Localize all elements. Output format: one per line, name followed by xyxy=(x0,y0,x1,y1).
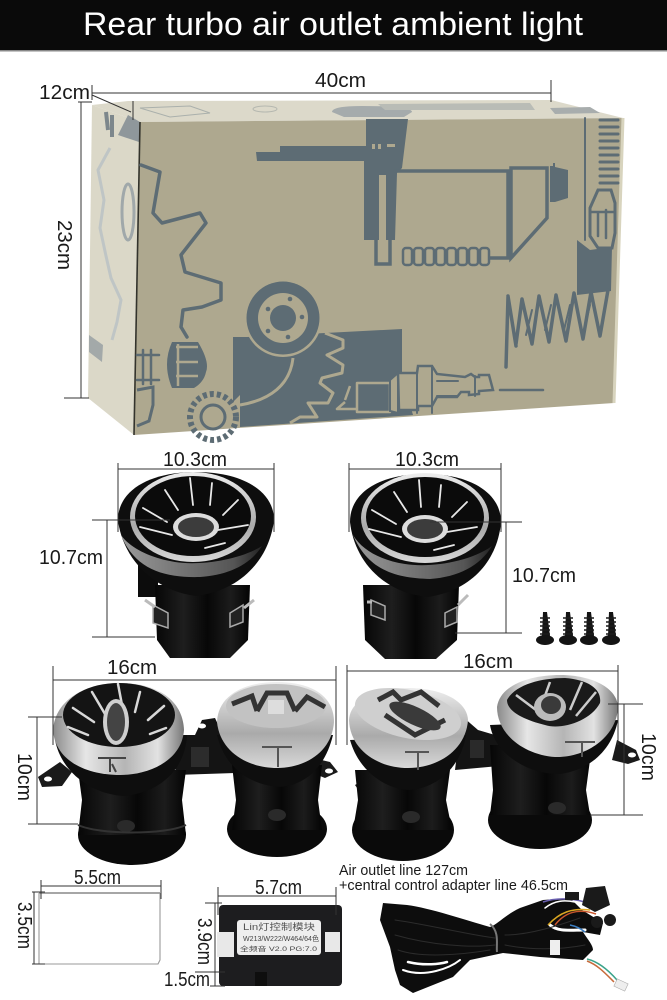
adhesive pad xyxy=(39,893,160,964)
dimension: left pair 16cm xyxy=(53,657,336,745)
dimension: box 12cm xyxy=(39,82,133,120)
screw 1 xyxy=(536,612,554,645)
dimension: box 12cm: 12cm xyxy=(39,82,90,104)
front print: small gear xyxy=(190,394,236,440)
dimension: right pair 16cm: 16cm xyxy=(463,651,513,673)
dimension: box 23cm: 23cm xyxy=(53,220,75,270)
harness label tag xyxy=(550,940,560,955)
module label: Lin灯控制模块 xyxy=(243,921,315,932)
cable length note xyxy=(339,862,568,894)
dimension: left pair 16cm: 16cm xyxy=(107,657,157,679)
cable texture xyxy=(395,918,585,955)
dimension: right vent 10.3cm: 10.3cm xyxy=(395,449,459,471)
dimension: left vent 10.7cm: 10.7cm xyxy=(39,547,103,569)
front vent left xyxy=(118,472,274,658)
front print: gear outline xyxy=(141,165,221,337)
wiring harness xyxy=(380,886,628,993)
coloured wires xyxy=(543,899,617,982)
module label: 全频音 V2.0 PG:7.0 xyxy=(240,944,318,953)
outlet B xyxy=(217,682,338,857)
dimension: box 23cm xyxy=(53,102,92,398)
screw 3 xyxy=(580,612,598,645)
box left side xyxy=(88,105,140,435)
dimension: module 3.9cm xyxy=(193,903,222,986)
control module xyxy=(217,905,342,986)
dimension: pad 5.5cm: 5.5cm xyxy=(74,867,121,889)
dimension: box 40cm: 40cm xyxy=(315,70,366,92)
packaging box xyxy=(88,100,623,440)
outlet A xyxy=(38,683,187,865)
dimension: module 5.7cm: 5.7cm xyxy=(255,877,302,899)
dimension: right pair 16cm xyxy=(347,651,618,745)
front print: drill xyxy=(256,119,568,265)
harness connectors xyxy=(565,886,616,928)
dimension: right pair 10cm: 10cm xyxy=(637,733,659,781)
tie at bundle centre xyxy=(490,924,497,952)
front vent right xyxy=(350,473,501,659)
dimension: right vent 10.7cm: 10.7cm xyxy=(512,565,576,587)
box top flap xyxy=(92,100,623,122)
gaps between cables xyxy=(403,901,585,973)
dimension: left pair 10cm xyxy=(13,717,78,824)
cable length note: +central control adapter line 46.5cm xyxy=(339,877,568,894)
bracket bridge xyxy=(455,717,510,770)
dimension: pad 5.5cm xyxy=(41,867,161,899)
mounting screws xyxy=(536,612,620,645)
bracket bridge xyxy=(175,718,235,775)
dimension: module 3.9cm: 3.9cm xyxy=(193,918,215,965)
front print: block with wheel, gears, spark plug xyxy=(233,279,543,427)
cable length note: Air outlet line 127cm xyxy=(339,862,468,879)
twin vent assembly left xyxy=(38,682,338,865)
white plug xyxy=(614,979,628,991)
dimension: left pair 10cm: 10cm xyxy=(13,753,35,801)
outlet D xyxy=(488,675,640,849)
dimension: right vent 10.3cm xyxy=(349,449,501,532)
screw 2 xyxy=(559,612,577,645)
front print: bulb xyxy=(137,342,207,426)
dimension: right pair 10cm xyxy=(590,704,659,815)
outlet C xyxy=(349,679,468,861)
dimension: left vent 10.7cm xyxy=(39,520,170,637)
cable bundle silhouette xyxy=(380,898,603,993)
dimension: right vent 10.7cm xyxy=(430,522,576,633)
dimension: left vent 10.3cm: 10.3cm xyxy=(163,449,227,471)
box front face xyxy=(134,118,623,435)
title banner: Rear turbo air outlet ambient light xyxy=(83,6,583,42)
dimension: box 40cm xyxy=(92,70,551,102)
dimension: module 5.7cm xyxy=(218,877,336,915)
twin vent assembly right xyxy=(349,675,640,861)
dimension: module 1.5cm: 1.5cm xyxy=(164,969,210,991)
module label: W213/W222/W464/64色 xyxy=(243,934,319,943)
module label xyxy=(237,920,321,955)
title banner xyxy=(0,0,667,52)
dimension: pad 3.5cm xyxy=(13,892,45,964)
screw 4 xyxy=(602,612,620,645)
front print: right tool and springs xyxy=(506,118,618,367)
dimension: left vent 10.3cm xyxy=(118,449,274,532)
dimension: pad 3.5cm: 3.5cm xyxy=(13,902,35,949)
